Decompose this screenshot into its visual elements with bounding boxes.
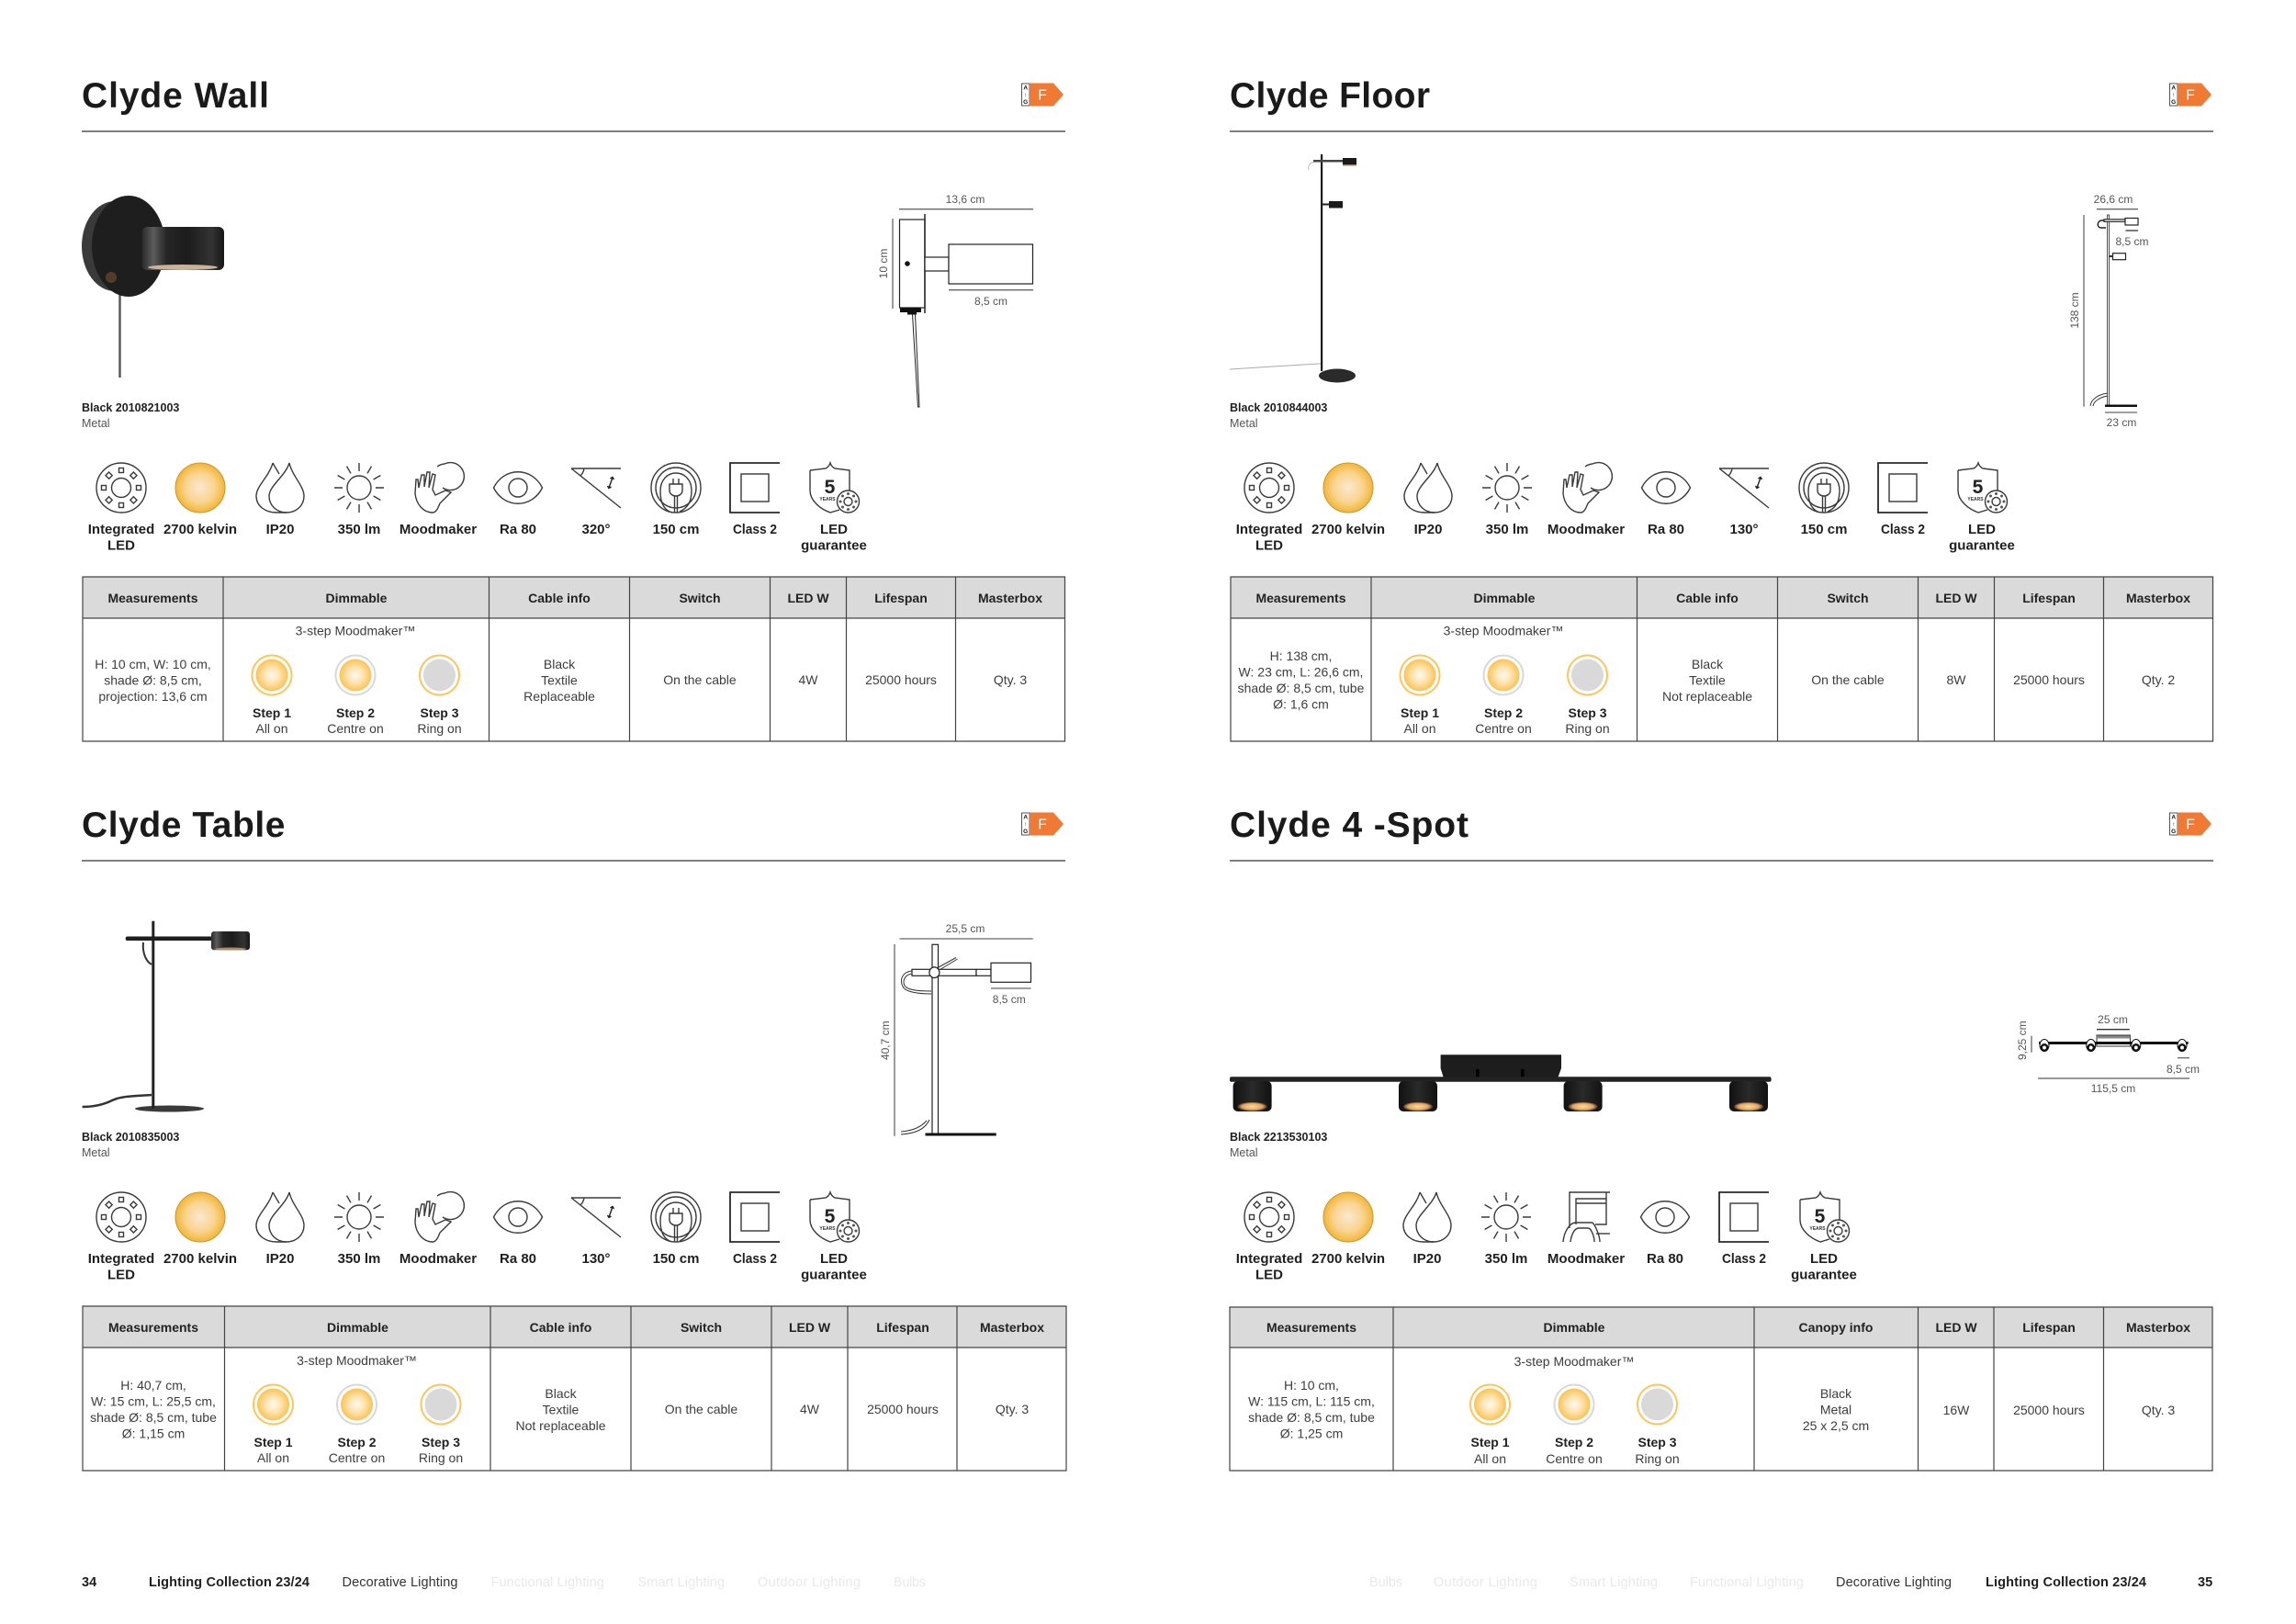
icon: 350 lm (334, 463, 384, 537)
table headers (1255, 591, 2190, 605)
table headers: LED W (789, 1320, 831, 1335)
feature icon row (1236, 463, 2015, 553)
footer: left page (82, 1575, 926, 1590)
icon: integrated LED: LED (1255, 1268, 1283, 1282)
dimmable steps (1400, 623, 1610, 736)
dimmable steps: All on (1474, 1451, 1506, 1466)
icon: integrated LED: Integrated (88, 522, 154, 537)
icon: 350 lm (1482, 463, 1532, 537)
icon: 2700 kelvin (163, 1192, 237, 1267)
table headers: Lifespan (2022, 1320, 2076, 1335)
energy label badge: ↑ (2172, 821, 2175, 828)
icon: LED guarantee: guarantee (801, 1268, 867, 1282)
dimension drawing: 4-spot: 8,5 cm (2167, 1063, 2200, 1076)
icon: 150 cm cable (651, 1192, 701, 1267)
icon: Ra 80: Ra 80 (1647, 1251, 1683, 1267)
product code and material (1230, 401, 1327, 430)
dimension drawing: wall lamp: 10 cm (877, 249, 890, 278)
measurements: H: 10 cm, W: 10 cm, (95, 657, 211, 671)
table headers: Dimmable (1474, 591, 1536, 605)
table headers (108, 1320, 1044, 1335)
switch: On the cable (663, 672, 737, 687)
panel: Clyde 4-Spot (1230, 806, 2213, 1471)
table headers: Cable info (528, 591, 591, 605)
icon: Ra 80: Ra 80 (500, 522, 536, 537)
energy label badge: A (2171, 85, 2176, 92)
table headers: Dimmable (327, 1320, 388, 1335)
icon: 350 lm (334, 1192, 384, 1267)
canopy info: Metal (1820, 1402, 1851, 1416)
product code and material: Metal (1230, 417, 1258, 430)
icon: 2700 kelvin: 2700 kelvin (163, 522, 237, 537)
product code and material: Metal (1230, 1146, 1258, 1159)
table headers: Dimmable (1544, 1320, 1605, 1335)
energy label badge (2169, 83, 2212, 107)
title: Clyde Wall (82, 76, 269, 116)
icon: integrated LED: LED (107, 538, 135, 553)
dimmable steps: Step 2 (1484, 705, 1523, 720)
feature icon row (88, 1192, 867, 1282)
icon: integrated LED: Integrated (1236, 1251, 1302, 1267)
measurements: shade Ø: 8,5 cm, (104, 672, 202, 687)
table headers: Masterbox (980, 1320, 1044, 1335)
icon: Class 2: Class 2 (1881, 522, 1925, 537)
product code and material (82, 401, 179, 430)
icon: IP20: IP20 (1414, 522, 1442, 537)
icon: Moodmaker (1548, 463, 1625, 537)
icon: 350 lm (1481, 1192, 1531, 1267)
panel: Clyde Table (82, 806, 1066, 1471)
product photo: 4-spot ceiling lamp (1230, 1054, 1772, 1111)
icon: LED guarantee (1949, 463, 2015, 553)
icon: 2700 kelvin (1311, 463, 1385, 537)
footer: left page: Decorative Lighting (342, 1575, 457, 1590)
table headers: LED W (1935, 1320, 1977, 1335)
dimension drawing: 4-spot (2016, 1013, 2200, 1095)
icon: LED guarantee: guarantee (801, 538, 867, 553)
energy label badge: F (1038, 88, 1047, 103)
energy label badge: F (2186, 818, 2195, 832)
energy label badge (1021, 83, 1064, 107)
icon: 2700 kelvin (1311, 1192, 1385, 1267)
icon: integrated LED (88, 463, 154, 553)
product code and material: Metal (82, 1146, 110, 1159)
energy label badge (2169, 812, 2212, 836)
icon: IP20: IP20 (266, 1251, 294, 1267)
icon: 350 lm: 350 lm (1485, 1251, 1527, 1267)
energy label badge: ↑ (2172, 92, 2175, 98)
specification table (1230, 1307, 2212, 1471)
masterbox: Qty. 3 (994, 672, 1027, 687)
icon: IP20 (256, 463, 304, 537)
feature icon row (88, 463, 867, 553)
icon: 150 cm cable (1799, 463, 1849, 537)
feature icon row (1236, 1192, 1857, 1282)
dimension drawing: table lamp: 8,5 cm (993, 993, 1026, 1006)
dimension drawing: floor lamp: 26,6 cm (2094, 193, 2133, 206)
icon: Ra 80 (1642, 472, 1690, 537)
icon: LED guarantee: guarantee (1949, 538, 2015, 553)
dimmable steps: Step 1 (253, 705, 291, 720)
footer: left page: 34 (82, 1575, 96, 1590)
dimmable steps: All on (257, 1450, 289, 1465)
dimension drawing: wall lamp (877, 193, 1033, 407)
cable info: Black (1692, 657, 1723, 671)
title: Clyde Table (82, 806, 285, 845)
product photo: floor lamp (1230, 154, 1356, 382)
table headers: Measurements (1266, 1320, 1356, 1335)
icon: Ra 80: Ra 80 (500, 1251, 536, 1267)
table headers: Switch (1827, 591, 1869, 605)
dimmable steps: Step 2 (337, 1435, 377, 1449)
dimension drawing: 4-spot: 9,25 cm (2016, 1021, 2029, 1060)
product code and material: Black 2010821003 (82, 401, 179, 414)
product code and material: Metal (82, 417, 110, 430)
lifespan: 25000 hours (865, 672, 937, 687)
dimension drawing: floor lamp: 8,5 cm (2115, 235, 2149, 248)
footer: right page: Smart Lighting (1570, 1575, 1658, 1590)
dimmable steps: Ring on (419, 1450, 463, 1465)
dimmable steps: Centre on (329, 1450, 385, 1465)
measurements: Ø: 1,25 cm (1280, 1426, 1343, 1440)
icon: 150 cm cable: 150 cm (653, 522, 699, 537)
icon: integrated LED: Integrated (1236, 522, 1302, 537)
icon: 130 degrees (1719, 468, 1769, 537)
icon: Class 2: Class 2 (733, 1251, 777, 1267)
product photo: table lamp (83, 921, 250, 1111)
masterbox: Qty. 2 (2142, 672, 2175, 687)
table headers: Masterbox (978, 591, 1042, 605)
icon: 130 degrees: 130° (581, 1251, 611, 1267)
product code and material: Black 2213530103 (1230, 1131, 1327, 1144)
icon: Moodmaker remote (1548, 1192, 1625, 1267)
energy label badge: A (1023, 814, 1028, 821)
energy label badge: F (2186, 88, 2195, 103)
energy label badge: G (1023, 829, 1028, 835)
dimmable steps: Centre on (327, 721, 384, 736)
specification table (83, 577, 1065, 741)
dimmable steps: Ring on (1635, 1451, 1680, 1466)
icon: LED guarantee: LED (1810, 1251, 1838, 1267)
footer: right page: Lighting Collection 23/24 (1986, 1575, 2146, 1590)
cable info: Replaceable (523, 689, 595, 704)
footer: left page: Bulbs (894, 1575, 926, 1590)
icon: Class 2 (730, 463, 780, 537)
panel: Clyde Floor (1230, 76, 2213, 741)
icon: IP20: IP20 (1413, 1251, 1441, 1267)
icon: integrated LED: Integrated (88, 1251, 154, 1267)
product code and material (82, 1131, 179, 1159)
icon: 350 lm: 350 lm (338, 522, 380, 537)
dimmable steps: 3-step Moodmaker™ (1444, 623, 1563, 637)
icon: Moodmaker: Moodmaker (1548, 522, 1625, 537)
cable info: Not replaceable (515, 1418, 606, 1433)
measurements: W: 15 cm, L: 25,5 cm, (91, 1394, 216, 1409)
icon: integrated LED (88, 1192, 154, 1282)
dimmable steps: All on (255, 721, 288, 736)
LED wattage: 16W (1943, 1403, 1970, 1417)
LED wattage: 4W (799, 672, 818, 687)
cable info: Textile (1689, 672, 1726, 687)
icon: Moodmaker: Moodmaker (400, 522, 477, 537)
dimmable steps: 3-step Moodmaker™ (297, 1353, 417, 1368)
footer: right page: Functional Lighting (1690, 1575, 1804, 1590)
energy label badge: F (1038, 818, 1047, 832)
icon: LED guarantee: LED (820, 522, 848, 537)
table headers: Lifespan (2022, 591, 2076, 605)
dimmable steps: Step 1 (1470, 1435, 1510, 1449)
cable info: Not replaceable (1662, 689, 1752, 704)
table headers: Canopy info (1799, 1320, 1873, 1335)
dimmable steps: Step 3 (1638, 1435, 1677, 1449)
footer: right page: 35 (2198, 1575, 2212, 1590)
footer: right page (1369, 1575, 2212, 1590)
energy label badge: ↑ (1024, 92, 1027, 98)
panel: Clyde Wall (82, 76, 1065, 741)
icon: 2700 kelvin (163, 463, 237, 537)
dimension drawing: floor lamp (2068, 193, 2149, 429)
icon: Ra 80 (1640, 1201, 1690, 1267)
dimension drawing: table lamp (879, 922, 1033, 1136)
energy label badge: G (1023, 99, 1028, 106)
icon: IP20: IP20 (266, 522, 294, 537)
table headers: Dimmable (326, 591, 388, 605)
dimension drawing: wall lamp: 8,5 cm (974, 295, 1007, 308)
dimension drawing: table lamp: 40,7 cm (879, 1021, 892, 1060)
icon: LED guarantee (801, 463, 867, 553)
table headers (1266, 1320, 2190, 1335)
dimension drawing: 4-spot: 115,5 cm (2091, 1082, 2135, 1095)
dimmable steps: 3-step Moodmaker™ (296, 623, 415, 637)
dimension drawing: floor lamp: 138 cm (2068, 292, 2081, 329)
masterbox: Qty. 3 (2142, 1403, 2175, 1417)
table headers: LED W (1935, 591, 1977, 605)
table headers: Cable info (1676, 591, 1739, 605)
energy label badge: A (1023, 85, 1028, 92)
energy label badge (1021, 812, 1064, 836)
cable info: Black (544, 657, 575, 671)
icon: integrated LED (1236, 463, 1302, 553)
icon: 350 lm: 350 lm (338, 1251, 380, 1267)
canopy info: 25 x 2,5 cm (1803, 1418, 1869, 1433)
masterbox: Qty. 3 (996, 1402, 1029, 1416)
measurements: W: 115 cm, L: 115 cm, (1248, 1394, 1375, 1409)
icon: Moodmaker: Moodmaker (400, 1251, 477, 1267)
LED wattage: 4W (800, 1402, 820, 1416)
dimension drawing: wall lamp: 13,6 cm (946, 193, 985, 206)
footer: left page: Outdoor Lighting (758, 1575, 861, 1590)
dimmable steps: Step 1 (1401, 705, 1439, 720)
energy label badge: G (2171, 99, 2176, 106)
icon: 2700 kelvin: 2700 kelvin (1311, 1251, 1385, 1267)
energy label badge: ↑ (1024, 821, 1027, 828)
icon: LED guarantee: YEARS (819, 1226, 836, 1232)
measurements: W: 23 cm, L: 26,6 cm, (1239, 665, 1363, 680)
footer: left page: Functional Lighting (490, 1575, 604, 1590)
table headers: Switch (679, 591, 721, 605)
table headers: Masterbox (2126, 591, 2190, 605)
table headers: LED W (787, 591, 829, 605)
icon: LED guarantee: 5 (825, 477, 836, 498)
dimension drawing: 4-spot: 25 cm (2098, 1013, 2128, 1026)
canopy info: Black (1820, 1386, 1851, 1401)
icon: LED guarantee: 5 (825, 1206, 836, 1227)
measurements: shade Ø: 8,5 cm, tube (1238, 681, 1365, 695)
icon: Class 2 (1878, 463, 1928, 537)
product code and material: Black 2010835003 (82, 1131, 179, 1144)
icon: integrated LED: LED (107, 1268, 135, 1282)
cable info: Textile (541, 672, 578, 687)
dimmable steps: Step 2 (1555, 1435, 1593, 1449)
icon: integrated LED (1236, 1192, 1302, 1282)
icon: 150 cm cable: 150 cm (1801, 522, 1847, 537)
icon: LED guarantee: YEARS (819, 497, 836, 502)
icon: Moodmaker (400, 1192, 477, 1267)
icon: Class 2 (730, 1192, 780, 1267)
switch: On the cable (665, 1402, 737, 1416)
dimmable steps: Step 1 (253, 1435, 293, 1449)
icon: 130 degrees (571, 1198, 621, 1267)
energy label badge: A (2171, 814, 2176, 821)
icon: 350 lm: 350 lm (1486, 522, 1528, 537)
product code and material: Black 2010844003 (1230, 401, 1327, 414)
energy label badge: G (2171, 829, 2176, 835)
product photo: wall lamp (82, 196, 224, 378)
dimmable steps: All on (1403, 721, 1436, 736)
footer: right page: Outdoor Lighting (1434, 1575, 1537, 1590)
table headers: Masterbox (2126, 1320, 2190, 1335)
measurements: projection: 13,6 cm (98, 689, 208, 704)
icon: 150 cm cable (651, 463, 701, 537)
footer: left page: Lighting Collection 23/24 (149, 1575, 310, 1590)
icon: LED guarantee: 5 (1973, 477, 1984, 498)
dimension drawing: table lamp: 25,5 cm (946, 922, 985, 935)
icon: LED guarantee: LED (1968, 522, 1996, 537)
icon: integrated LED: LED (1255, 538, 1283, 553)
icon: LED guarantee: guarantee (1791, 1268, 1857, 1282)
dimmable steps: Step 3 (420, 705, 459, 720)
icon: LED guarantee: YEARS (1967, 497, 1984, 502)
dimmable steps: Centre on (1546, 1451, 1603, 1466)
icon: IP20 (1404, 463, 1452, 537)
measurements: H: 10 cm, (1284, 1378, 1339, 1393)
dimmable steps (253, 1353, 463, 1465)
icon: LED guarantee: YEARS (1809, 1226, 1826, 1232)
table headers: Measurements (108, 1320, 198, 1335)
dimmable steps: Ring on (1565, 721, 1610, 736)
measurements: shade Ø: 8,5 cm, tube (1248, 1410, 1375, 1425)
cable info: Textile (543, 1402, 580, 1416)
measurements: H: 40,7 cm, (120, 1378, 186, 1393)
dimmable steps: Centre on (1475, 721, 1532, 736)
footer: right page: Decorative Lighting (1836, 1575, 1952, 1590)
icon: LED guarantee: 5 (1815, 1206, 1826, 1227)
icon: Class 2 (1719, 1192, 1769, 1267)
icon: LED guarantee: LED (820, 1251, 848, 1267)
switch: On the cable (1811, 672, 1885, 687)
icon: 2700 kelvin: 2700 kelvin (163, 1251, 237, 1267)
lifespan: 25000 hours (2013, 672, 2085, 687)
icon: 320 degrees (571, 468, 621, 537)
dimmable steps: Step 3 (1568, 705, 1607, 720)
icon: Moodmaker (400, 463, 477, 537)
dimmable steps (1470, 1354, 1680, 1466)
table headers: Cable info (530, 1320, 591, 1335)
dimmable steps: Ring on (417, 721, 462, 736)
table headers (107, 591, 1042, 605)
table headers: Measurements (1255, 591, 1346, 605)
title: Clyde Floor (1230, 76, 1430, 116)
product code and material (1230, 1131, 1327, 1159)
lifespan: 25000 hours (867, 1402, 939, 1416)
table headers: Lifespan (874, 591, 928, 605)
dimmable steps: 3-step Moodmaker™ (1514, 1354, 1634, 1369)
title: Clyde 4 -Spot (1230, 806, 1469, 845)
icon: Moodmaker remote: Moodmaker (1548, 1251, 1625, 1267)
icon: LED guarantee (801, 1192, 867, 1282)
LED wattage: 8W (1947, 672, 1966, 687)
icon: 130 degrees: 130° (1729, 522, 1759, 537)
icon: 320 degrees: 320° (581, 522, 611, 537)
icon: IP20 (256, 1192, 304, 1267)
dimension drawing: floor lamp: 23 cm (2107, 416, 2136, 429)
icon: Class 2: Class 2 (733, 522, 777, 537)
icon: Ra 80 (494, 472, 542, 537)
icon: 2700 kelvin: 2700 kelvin (1311, 522, 1385, 537)
icon: Ra 80: Ra 80 (1648, 522, 1684, 537)
footer: left page: Smart Lighting (637, 1575, 725, 1590)
measurements: Ø: 1,15 cm (122, 1426, 185, 1440)
specification table (1231, 577, 2213, 741)
measurements: Ø: 1,6 cm (1273, 696, 1329, 711)
dimmable steps: Step 2 (336, 705, 375, 720)
specification table (83, 1306, 1066, 1471)
dimmable steps (252, 623, 462, 736)
icon: 150 cm cable: 150 cm (653, 1251, 699, 1267)
measurements: H: 138 cm, (1270, 648, 1332, 663)
icon: Class 2: Class 2 (1722, 1251, 1766, 1267)
table headers: Lifespan (876, 1320, 929, 1335)
footer: right page: Bulbs (1369, 1575, 1402, 1590)
cable info: Black (545, 1386, 577, 1401)
measurements: shade Ø: 8,5 cm, tube (90, 1410, 217, 1425)
icon: IP20 (1403, 1192, 1451, 1267)
table headers: Switch (681, 1320, 722, 1335)
icon: Ra 80 (494, 1201, 542, 1267)
dimmable steps: Step 3 (422, 1435, 460, 1449)
icon: LED guarantee (1791, 1192, 1857, 1282)
lifespan: 25000 hours (2013, 1403, 2085, 1417)
table headers: Measurements (107, 591, 198, 605)
